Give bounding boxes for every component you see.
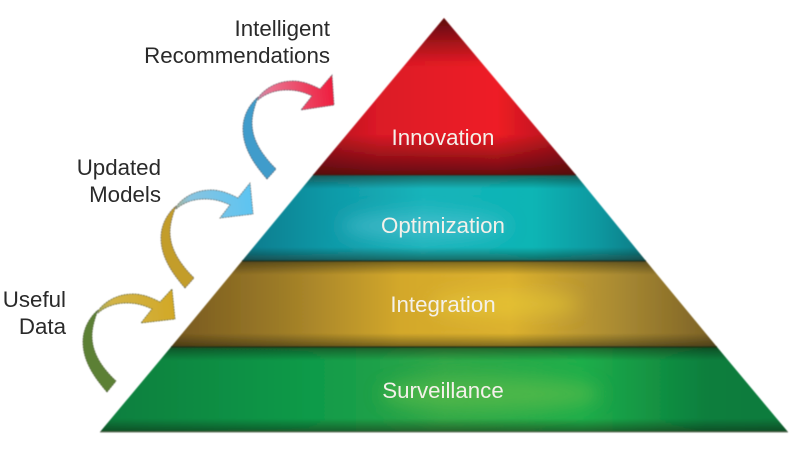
arrow: gold and light blue, to Updated Models (161, 183, 253, 288)
label: Optimization: Optimization (381, 213, 505, 238)
tier: Optimization (242, 175, 646, 261)
caption: Updated Models: Updated (77, 155, 161, 180)
caption: Intelligent Recommendations: Intelligent (235, 16, 331, 41)
label: Surveillance: Surveillance (382, 378, 504, 403)
caption: Intelligent Recommendations (144, 16, 331, 68)
pyramid (100, 18, 788, 432)
caption: Useful Data: Useful (3, 287, 66, 312)
caption: Updated Models: Models (89, 182, 161, 207)
tier labels (381, 125, 505, 403)
tier: Surveillance (100, 347, 788, 432)
caption: Useful Data (3, 287, 67, 339)
tier: Integration (171, 261, 717, 347)
arrow: red and blue, to Intelligent Recommendations (243, 75, 334, 179)
arrow: green and gold, to Useful Data (83, 289, 175, 392)
caption: Useful Data: Data (19, 314, 67, 339)
label: Innovation: Innovation (392, 125, 494, 150)
label: Integration: Integration (390, 292, 496, 317)
caption: Updated Models (77, 155, 161, 207)
caption: Intelligent Recommendations: Recommendations (144, 43, 330, 68)
tier: Innovation (313, 18, 576, 175)
